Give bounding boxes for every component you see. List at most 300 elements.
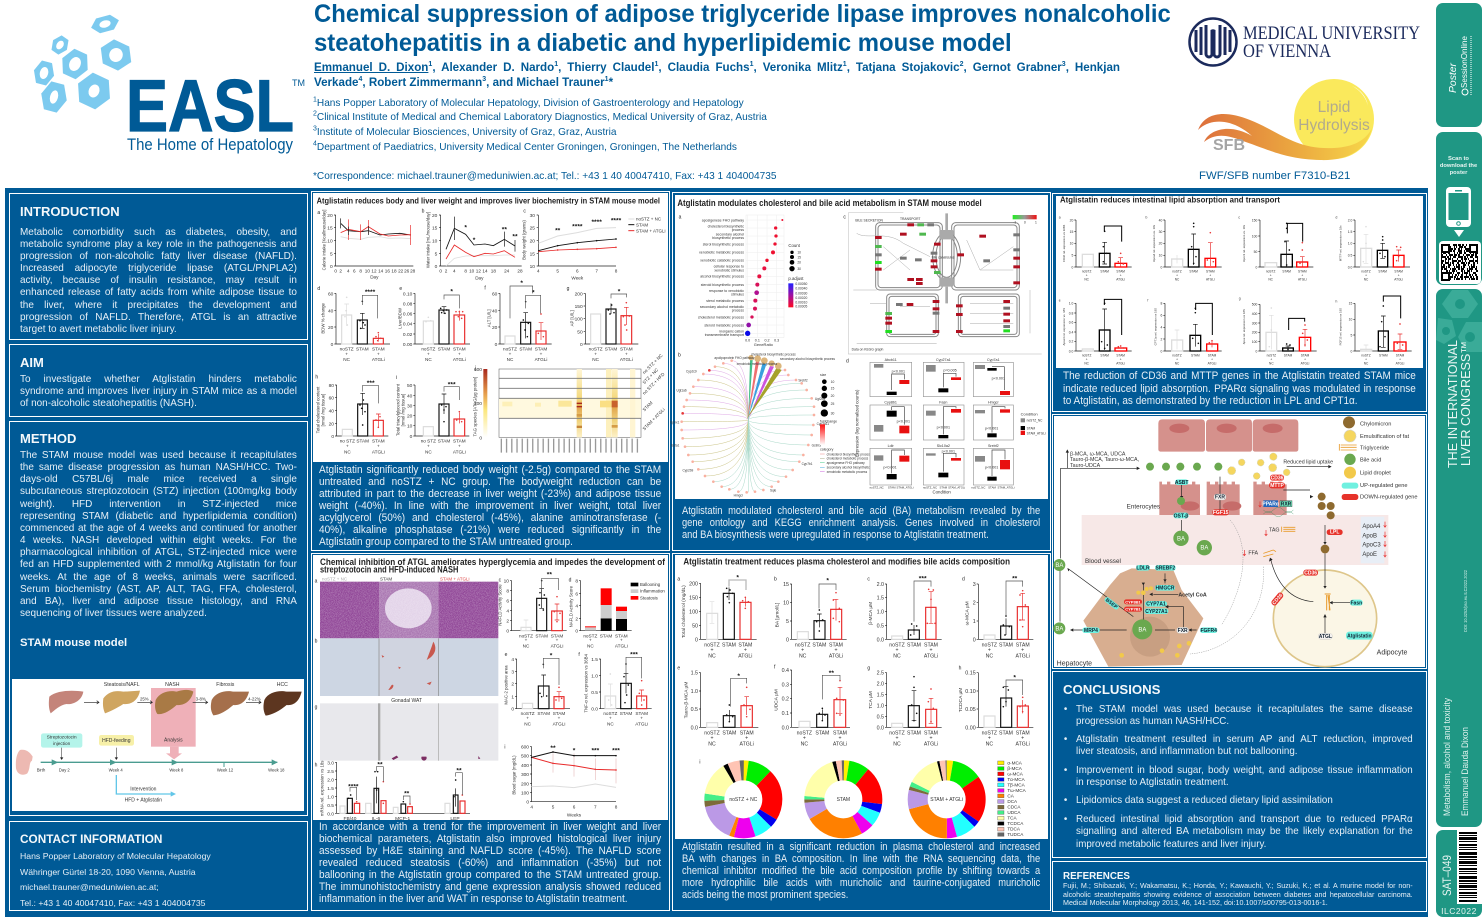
gene chips: up-regulated: Atglistatin — [1347, 633, 1372, 639]
chart d: gene expression box plots: STAM — [940, 486, 948, 490]
chart g: Apoe — [1239, 296, 1317, 366]
chart i: blood sugar: * — [573, 748, 576, 755]
chart d: gene expression box plots: p<0.001 — [985, 426, 998, 430]
chart e: liver/BDW: + — [427, 351, 430, 356]
chart d: gene expression box plots: STAM_ATGLi — [1027, 431, 1046, 435]
chart f: ALT: 20 — [492, 325, 498, 331]
panel: mechanism diagram — [1052, 414, 1427, 669]
chart a: CD36: STAM — [1116, 269, 1125, 273]
chart b: Apoa4: Apoa4 rel. expression vs. 18s — [1152, 224, 1156, 262]
chart h: FGF: ATGLi — [1396, 362, 1405, 366]
chart h: total cholesterol: + — [346, 444, 349, 449]
text: introduction: target to avert metabolic liver injury. — [20, 323, 177, 335]
diagram b: gene-concept network: category — [820, 448, 834, 452]
panel: references — [1052, 861, 1427, 912]
text: bile acid findings: chemical inhibitor modified the bile acid composition profile by shifting towards a — [682, 865, 1040, 877]
labels: FFA — [1248, 550, 1259, 556]
heading: references: REFERENCES — [1063, 871, 1130, 882]
chart a: GO dot plot: 0.00040 — [795, 287, 808, 291]
chart i: total acylglycerol: i — [396, 375, 397, 381]
chart c: body weight: 8 — [615, 268, 618, 273]
heading: contact: CONTACT INFORMATION — [20, 832, 162, 846]
text: bile acid findings: BA with changes in BA composition. In line with the RNA sequencing data, the — [682, 853, 1040, 865]
chart h: total cholesterol: STAM — [356, 439, 369, 444]
legend: bile acids: Tω-MCA — [1007, 788, 1027, 793]
chart g: Apoe: noSTZ — [1267, 353, 1276, 357]
chart a: CD36: 20 — [1070, 218, 1073, 222]
chart d: BDW change: NC — [343, 357, 351, 362]
chart c: Apoc3: 50 — [1254, 250, 1257, 254]
chart b: BA: noSTZ — [795, 643, 810, 649]
chart d: BDW change: BDW % change — [321, 302, 326, 334]
chart b: BA: STAM — [829, 643, 843, 649]
chart a: total cholesterol: 150 — [689, 595, 698, 601]
sidebar panel: poster number and barcode: SAT–049 — [1440, 855, 1454, 896]
chart e: Apoa1: STAM — [1100, 353, 1109, 357]
chart g: Apoe: NC — [1269, 362, 1274, 366]
chart h: total cholesterol: 0 — [331, 434, 334, 440]
panel title: Atglistatin reduces body and liver weight and improves liver biochemistry in STAM mouse model — [317, 196, 660, 206]
diagram b: gene-concept network: aposigenese FHO pathway — [827, 461, 865, 465]
chart f: TNF-a: noSTZ — [603, 711, 617, 716]
chart b: BA: NC — [799, 654, 807, 660]
diagram b: gene-concept network: Ephx1 — [670, 420, 680, 424]
legend: bile acids: TCDCA — [1007, 821, 1024, 826]
chart d: MTTP: NC — [1364, 278, 1369, 282]
chart e: Apoa1: + — [1120, 357, 1122, 361]
chart a: GO dot plot: steroid biosynthetic process — [701, 283, 744, 287]
chart h: FGF: + — [1365, 357, 1367, 361]
chart j: TAG species heatmap: 200 — [474, 401, 482, 407]
chart d: BDW change: ATGLi — [372, 357, 385, 362]
timeline: Week 12 — [217, 768, 234, 773]
chart b: water intake: 10 — [432, 239, 438, 245]
chart h: total cholesterol: 20 — [329, 421, 334, 427]
labels: Acetyl CoA — [1178, 593, 1207, 599]
chart b: Apoa4: STAM — [1206, 269, 1215, 273]
chart c: b-MCA: + — [929, 647, 933, 653]
text: histology findings — [319, 821, 662, 905]
chart b: Apoa4: 10 — [1159, 254, 1162, 258]
chart a: GO dot plot: aposigenese FHO pathway — [702, 218, 744, 222]
chart d: w-MCA: 0 — [973, 637, 976, 643]
chart i: total acylglycerol: 30 — [407, 403, 413, 409]
chart h: FGF: STAM — [1396, 353, 1405, 357]
chart d: gene expression box plots: p<0.001 — [992, 376, 1005, 380]
text: body and liver weight findings: 40%), alkaline phosphatase (-21%) were reduced significantly in the — [319, 524, 661, 536]
chart h: TCDCA: NC — [986, 742, 993, 748]
chart e: liver/BDW: NC — [425, 357, 432, 362]
chart f: TNF-a: STAM — [620, 711, 632, 716]
diagram b: gene-concept network — [670, 352, 872, 498]
chart d: MTTP: STAM — [1378, 269, 1387, 273]
chart a: total cholesterol: * — [736, 574, 739, 581]
chart d: w-MCA: d — [962, 577, 965, 583]
labels — [1057, 451, 1408, 667]
text: references: Fujii, M.; Shibazaki, Y.; Wakamatsu, K.; Honda, Y.; Kawauchi, Y.; Suzuki, K.; et al. A murine model for non- — [1063, 881, 1413, 890]
charts: plasma cholesterol and bile acids — [677, 556, 1034, 838]
chart a: GO dot plot: steroid metabolic process — [704, 323, 744, 327]
chart g: Apoe: 400 — [1252, 312, 1257, 316]
labels: Hepatocyte — [1057, 660, 1092, 667]
chart e: MAC-2: ATGLi — [553, 721, 565, 726]
diagram: gut liver adipose mechanism: BA — [1138, 627, 1146, 633]
chart c: b-MCA: noSTZ — [889, 643, 905, 649]
text: method: Serum biochemistry (AST, AP, ALT, TAG, FFA, cholesterol, — [20, 583, 297, 595]
chart a: GO dot plot: 0.0 — [745, 338, 750, 342]
chart i: blood sugar: 200 — [521, 781, 529, 787]
chart h: total cholesterol: Total cholesterol content — [315, 386, 320, 433]
chart c: NAFLD activity score: 0 — [506, 629, 509, 635]
text: aim: syndrome and improves liver injury in STAM mice as a model — [20, 385, 297, 397]
chart d: NAFLD score stacked: 4 — [575, 604, 578, 610]
chart i: blood sugar: 500 — [521, 754, 529, 760]
diagram b: gene-concept network: Cyp3a11 — [817, 422, 829, 426]
chart h: total cholesterol: *** — [367, 380, 375, 387]
chart g: AP: STAM — [620, 347, 633, 352]
chart a: GO dot plot: xenobiotic catabolic process — [700, 259, 744, 263]
sidebar panel: scan to download: poster — [1450, 170, 1468, 176]
chart a: caloric intake: 4 — [347, 268, 350, 273]
chart g: Apoe: + — [1304, 357, 1306, 361]
chart b: water intake: 0 — [439, 268, 442, 273]
chart a: caloric intake: 8 — [359, 268, 362, 273]
chart e: MAC-2: 1 — [511, 694, 514, 700]
chart j: TAG species heatmap: 0 — [479, 435, 482, 441]
chart c: Apoc3: Apoc3 rel. expression vs. 18s — [1242, 224, 1246, 262]
text: method — [20, 449, 297, 619]
chart e: liver/BDW — [398, 286, 470, 362]
chart h: total cholesterol: 60 — [329, 396, 334, 402]
gene chips: up-regulated: OST-β — [1174, 513, 1188, 519]
sidebar panel: scan to download: Scan to — [1448, 156, 1469, 162]
chart g: TCA: STAM — [907, 731, 921, 737]
chart e: liver/BDW: 0.08 — [403, 301, 413, 307]
chart a: caloric intake: 28 — [410, 268, 416, 273]
gene chips: neutral: ATGL — [1319, 634, 1332, 640]
chart c: b-MCA — [867, 576, 942, 660]
chart e: Apoa1 — [1059, 299, 1132, 366]
chart c: Apoc3: 100 — [1252, 234, 1257, 238]
chart f: CPT1a: ATGLi — [1208, 362, 1217, 366]
text: method: commenced at the age of 4 weeks and continued for another — [20, 522, 297, 534]
chart c: NAFLD activity score: 8 — [506, 589, 509, 595]
chart e: Tauro-b-MCA: * — [737, 673, 740, 680]
icon: newborn mouse — [16, 750, 33, 775]
chart c: body weight: noSTZ + NC — [636, 217, 662, 222]
chart g: TCA: NC — [893, 742, 901, 748]
chart c: b-MCA: ATGLi — [924, 654, 938, 660]
affiliations: 1Hans Popper Laboratory of Molecular Hepatology, Division of Gastroenterology and Hepatology — [313, 97, 744, 109]
panel: method — [9, 421, 308, 816]
chart a: GO dot plot: transmembrane transport — [705, 333, 744, 337]
chart c: Apoc3: noSTZ — [1266, 269, 1275, 273]
chart a: caloric intake: 0 — [330, 264, 333, 270]
chart j: TAG species heatmap: STAM + ATGLi — [642, 407, 666, 431]
chart h: total cholesterol: ATGLi — [372, 450, 385, 455]
chart i: total acylglycerol: STAM — [453, 439, 466, 444]
chart e: liver/BDW: 0.02 — [403, 332, 413, 338]
chart i: blood sugar: *** — [591, 748, 600, 755]
legend: bile acids: β-MCA — [1007, 766, 1023, 771]
text: aim — [20, 373, 297, 409]
list: conclusions: Lipidomics data suggest a reduced dietary lipid assimilation — [1076, 794, 1333, 806]
chart e: MAC-2: STAM — [553, 711, 565, 716]
chart d: gene expression box plots: p<0.001 — [897, 419, 910, 423]
chart a: GO dot plot: xenobiotic metabolic process — [699, 251, 744, 255]
text: cholesterol findings — [682, 505, 1040, 541]
chart d: BDW change: 40 — [328, 308, 334, 314]
panel: plasma cholesterol and bile acids — [672, 553, 1051, 911]
chart b: Apoa4 — [1145, 215, 1222, 282]
chart g: AP — [567, 286, 638, 362]
chart a: GO dot plot: xenobiotic stimulus — [714, 268, 744, 272]
chart i: blood sugar: 7 — [594, 805, 597, 810]
chart c: body weight: ** — [555, 228, 561, 235]
legend: bile acids: TCA — [1007, 816, 1018, 821]
chart b: water intake: 12 — [476, 268, 481, 273]
chart i: total acylglycerol — [395, 375, 469, 455]
legend: bile acids: Tβ-MCA — [1007, 782, 1026, 787]
list: conclusions: • — [1064, 703, 1067, 715]
chart a: GO dot plot: 0.00020 — [795, 296, 808, 300]
chart h: inflammation gene expression: 1.0 — [327, 794, 334, 800]
chart a: total cholesterol: a — [677, 577, 680, 583]
chart f: ALT: + — [540, 351, 543, 356]
text: references: Medical Molecular Morphology 2013, 46, 141-152, doi:10.1007/s00795-013-0016-1. — [1063, 898, 1328, 907]
chart c: b-MCA: β-MCA µM — [868, 602, 874, 625]
chart f: CPT1a: 2 — [1160, 337, 1162, 341]
chart e: Apoa1: 0.2 — [1069, 340, 1073, 344]
chart e: Apoa1: NC — [1084, 362, 1090, 366]
chart g: AP: ATGLi — [620, 357, 633, 362]
chart g: Apoe: 100 — [1252, 340, 1257, 344]
text: body and liver weight findings: untreated and noSTZ + NC group. The bodyweight reduction can be — [319, 476, 661, 488]
chart e: MAC-2: + — [558, 715, 561, 720]
chart a: total cholesterol: STAM — [738, 643, 752, 649]
title: steatohepatitis in a diabetic and hyperlipidemic mouse model — [314, 29, 1012, 57]
chart c: body weight: **** — [591, 219, 602, 226]
chart d: gene expression box plots: Ldlr — [888, 444, 894, 448]
chart i: blood sugar: 400 — [521, 763, 529, 769]
gene chips: up-regulated: CYP7A1 — [1146, 602, 1166, 608]
chart d: BDW change: **** — [365, 289, 376, 296]
sidebar panel: poster session online: Poster — [1448, 62, 1459, 93]
panel title: Chemical inhibition of ATGL ameliorates hyperglycemia and impedes the development of — [320, 557, 665, 567]
chart h: TCDCA: 0.15 — [965, 671, 976, 677]
chart i: blood sugar: *** — [612, 748, 620, 755]
diagram c: KEGG pathway: Data on KEGG graph — [852, 348, 883, 352]
chart a: caloric intake: 26 — [404, 268, 410, 273]
chart b: BA: 5 — [786, 619, 789, 625]
chart e: MAC-2: 2 — [511, 682, 514, 688]
labels: β-MCA, ω-MCA, UDCA — [1070, 451, 1126, 457]
chart a: CD36: + — [1120, 273, 1122, 277]
chart a: CD36 — [1059, 215, 1132, 282]
chart a: total cholesterol: + — [744, 647, 747, 653]
list: conclusions: Reduced intestinal lipid absorption and transport due to reduced PPARα — [1076, 813, 1413, 825]
chart c: body weight: 15 — [530, 251, 535, 257]
text: body and liver weight findings: Atglistatin group compared to the STAM untreated group. — [319, 536, 573, 548]
text: references — [1063, 881, 1413, 907]
chart a: caloric intake: 18 — [391, 268, 397, 273]
timeline: Week 4 — [109, 768, 123, 773]
chart f: ALT: + — [509, 351, 512, 356]
chart i: blood sugar: 300 — [521, 772, 529, 778]
panel: body and liver weight — [311, 191, 670, 551]
chart b: water intake: b — [422, 209, 425, 215]
QR code — [1439, 241, 1481, 284]
chart i: total acylglycerol: [nmol /mg tissue] — [400, 394, 405, 426]
logo: Medical University of Vienna — [1188, 17, 1420, 67]
diagram b: gene-concept network: xenobiotic metabolic process — [737, 362, 778, 366]
chart e: liver/BDW: 0.00 — [403, 342, 413, 348]
chart b: water intake: 28 — [517, 268, 523, 273]
chart d: gene expression box plots: Hmgcr — [988, 401, 999, 405]
chart d: BDW change: STAM — [372, 347, 385, 352]
chart e: MAC-2: 4 — [511, 657, 514, 663]
chart a: CD36: NC — [1084, 278, 1090, 282]
chart e: Apoa1: ATGLi — [1116, 362, 1125, 366]
chart f: UDCA: ATGLi — [833, 742, 847, 748]
chart a: total cholesterol: 100 — [689, 609, 698, 615]
text: introduction: Increased adipocyte triglyceride lipase (ATGL/PNPLA2) — [20, 262, 297, 274]
chart h: inflammation gene expression: h — [315, 763, 318, 769]
chart f: UDCA: f — [774, 665, 776, 671]
chart g: TCA: TCA µM — [868, 691, 874, 709]
gene chips: down-regulated: FGF15 — [1213, 510, 1229, 516]
list: conclusions: • — [1064, 813, 1067, 825]
histology: H&E liver: a — [315, 578, 318, 584]
gene chips: up-regulated: ASBT — [1175, 480, 1188, 486]
chart f: UDCA: STAM — [833, 731, 847, 737]
legend: Emulsification of fat — [1360, 434, 1409, 440]
correspondence: *Correspondence: michael.trauner@meduniwien.ac.at; Tel.: +43 1 40 40047410, Fax: +43 1 404004735 — [313, 171, 776, 182]
panel title: Atglistatin reduces intestinal lipid absorption and transport — [1060, 196, 1280, 205]
chart d: NAFLD score stacked: 0 — [575, 629, 578, 635]
chart a: caloric intake: 15 — [327, 226, 333, 232]
EASL logo: EASL — [126, 66, 294, 147]
chart h: total cholesterol: NC — [344, 450, 351, 455]
chart g: Apoe: 300 — [1252, 321, 1257, 325]
diagram: STAM mouse model timeline — [12, 679, 304, 811]
chart b: BA: BA [µmol/L] — [775, 603, 781, 627]
EASL logo — [34, 14, 305, 154]
chart d: MTTP: 1.5 — [1348, 230, 1352, 234]
chart e: MAC-2: MAC-2 positive area — [503, 665, 508, 705]
chart e: Tauro-b-MCA: ATGLi — [740, 742, 754, 748]
chart b: BA: * — [826, 578, 829, 585]
chart d: BDW change: noSTZ — [340, 347, 354, 352]
panel: contact information — [9, 821, 308, 911]
sidebar panel: scan to download: download the — [1440, 163, 1478, 169]
sidebar panel: poster number and barcode: ILC2022 — [1441, 906, 1477, 916]
chart g: TCA: 0.0 — [877, 725, 884, 731]
chart d: NAFLD score stacked: STAM — [600, 634, 612, 639]
chart f: UDCA: UDCA µM — [773, 689, 779, 711]
text: body and liver weight findings — [319, 464, 661, 548]
legend: DOWN-regulated gene — [1360, 495, 1418, 501]
chart i: total acylglycerol: Total triacylglycerol content — [395, 383, 400, 436]
chart b: BA: b — [774, 577, 777, 583]
diagram c: KEGG pathway — [843, 213, 1042, 354]
diagram b: gene-concept network: Cyp2b9 — [682, 469, 694, 473]
chart i: blood sugar: 100 — [521, 790, 529, 796]
chart i: total acylglycerol: 10 — [407, 424, 413, 430]
chart c: Apoc3: 0 — [1255, 265, 1257, 269]
chart e: MAC-2: e — [505, 652, 508, 658]
chart f: UDCA: noSTZ — [797, 731, 812, 737]
chart a: total cholesterol: 50 — [692, 623, 698, 629]
logo: Medical University of Vienna: MEDICAL UNIVERSITY — [1243, 24, 1420, 44]
chart f: CPT1a: NC — [1175, 362, 1180, 366]
grant number: FWF/SFB number F7310-B21 — [1199, 170, 1350, 182]
chart h: inflammation gene expression: 2.5 — [327, 769, 334, 775]
chart c: Apoc3: ATGLi — [1298, 278, 1307, 282]
chart d: w-MCA: ** — [1012, 576, 1018, 583]
chart g: TCA: 1.0 — [877, 703, 884, 709]
chart g: TCA: + — [895, 735, 899, 741]
chart d: gene expression box plots: d — [846, 359, 849, 365]
chart a: caloric intake: 10 — [365, 268, 370, 273]
chart b: Apoa4: + — [1176, 273, 1178, 277]
intervention arrow: HFD + Atglistatin — [125, 798, 162, 804]
chart a: CD36: 0 — [1071, 265, 1073, 269]
text: histology findings: biochemical parameters, Atglistatin also improved histological liver injury — [319, 833, 661, 845]
chart d: MTTP: ATGLi — [1394, 278, 1403, 282]
chart a: caloric intake: 20 — [327, 213, 333, 219]
panel: intestinal lipid absorption — [1052, 193, 1427, 412]
diagram: STAM mouse model timeline: Steatosis/NAFL — [104, 682, 140, 688]
chart b: BA — [774, 577, 847, 660]
chart h: TCDCA: h — [959, 665, 962, 671]
chart a: total cholesterol — [677, 574, 757, 660]
chart a: GO dot plot: biosynthetic process — [712, 236, 744, 240]
chart f: UDCA — [773, 665, 850, 748]
text: method: The STAM mouse model was used because it recapitulates — [20, 449, 297, 461]
chart f: CPT1a: noSTZ — [1172, 353, 1182, 357]
text: intestinal findings: The reduction of CD36 and MTTP genes in the Atglistatin treated STAM mice — [1063, 370, 1416, 382]
chart a: CD36: 15 — [1070, 230, 1073, 234]
list: conclusions: • — [1064, 764, 1067, 776]
chart f: ALT: 60 — [492, 291, 498, 297]
chart d: gene expression box plots: p<0.001 — [937, 425, 950, 429]
hepatocyte — [1083, 568, 1203, 667]
chart d: NAFLD score stacked: noSTZ — [583, 634, 597, 639]
labels: Tauro-β-MCA, Tauro-ω-MCA, — [1070, 457, 1139, 463]
title — [314, 0, 1171, 57]
chart e: liver/BDW: e — [399, 286, 402, 292]
text: intestinal findings: to Atglistatin, as demonstrated by the reduction in LPL and CPT1α. — [1063, 395, 1358, 407]
diagram b: gene-concept network: Ugt2b5 — [815, 397, 825, 401]
chart d: MTTP: + — [1365, 273, 1367, 277]
chart c: body weight: 5 — [556, 268, 559, 273]
chart a: caloric intake: 6 — [353, 268, 356, 273]
chart f: ALT — [484, 280, 552, 362]
affiliations: 2Clinical Institute of Medical and Chemical Laboratory Diagnostics, Medical University of Graz, Austria — [313, 111, 767, 123]
chart c: Apoc3: + — [1301, 273, 1303, 277]
chart d: NAFLD score stacked: 8 — [575, 579, 578, 585]
logo: SFB Lipid Hydrolysis — [1198, 79, 1374, 160]
chart a: GO dot plot: sterol metabolic process — [706, 299, 744, 303]
sidebar panel: poster session online — [1436, 3, 1482, 127]
chart i: total acylglycerol: + — [458, 444, 461, 449]
chart b: water intake: 4 — [453, 268, 456, 273]
chart c: Apoc3: c — [1238, 215, 1240, 219]
text: method: and BA), liver and adipose tissue histology, and RNA — [20, 595, 297, 607]
chart e: MAC-2: + — [526, 715, 529, 720]
chart h: FGF: 15 — [1349, 302, 1352, 306]
